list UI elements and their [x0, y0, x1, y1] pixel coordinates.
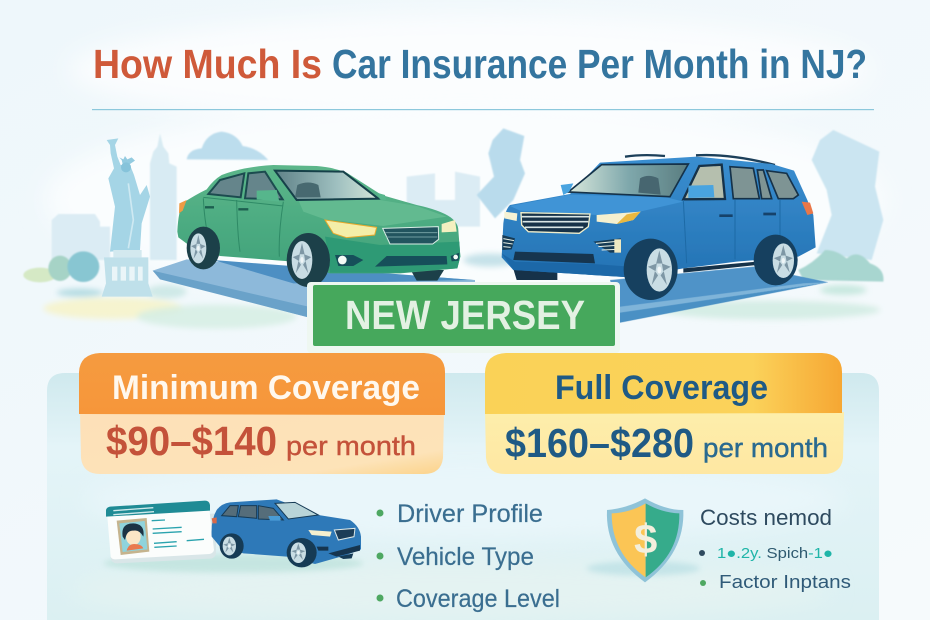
road platform left [153, 259, 475, 317]
full header band [485, 353, 842, 414]
icon: driver licence and small SUV [103, 499, 363, 573]
costs heading: Costs nemod [700, 505, 832, 530]
mirrors [561, 183, 714, 198]
item: vehicle type: Vehicle Type [397, 543, 534, 571]
NJ state silhouette left [477, 128, 525, 218]
ground wash [43, 285, 297, 329]
seat [638, 176, 661, 195]
lower intake and fog lights [335, 253, 459, 267]
small SUV [212, 499, 361, 567]
SUV underbody [683, 262, 757, 273]
minimum price: $90–$140 [106, 418, 277, 464]
costs line two: Factor Inptans [719, 572, 851, 592]
cloud [187, 132, 268, 160]
blue SUV [502, 155, 816, 300]
text: costs block [699, 505, 851, 592]
windshield [275, 171, 378, 200]
SUV hood [510, 195, 683, 215]
tail light [802, 202, 813, 215]
scenery: New Jersey landmarks left [23, 132, 480, 329]
icon: shield with dollar: $ [634, 515, 657, 562]
tower [150, 133, 177, 260]
door detail [203, 197, 283, 257]
front wheel [287, 233, 330, 287]
rear wheel [187, 227, 220, 269]
icon: shield with dollar [587, 498, 700, 582]
ground wash right [463, 253, 880, 319]
grille [383, 227, 439, 244]
headlights [325, 220, 377, 238]
ground wash under car [103, 554, 363, 573]
road platform right [610, 267, 828, 323]
full price band [485, 412, 844, 474]
side windows [683, 165, 725, 199]
door handles [205, 207, 248, 209]
full price: $160–$280 [505, 420, 694, 466]
door lines and handles [683, 200, 780, 263]
fog lights [502, 235, 621, 253]
list: cost factors [376, 500, 560, 613]
windshield [568, 164, 688, 197]
seat [295, 182, 321, 197]
distant buildings [52, 172, 480, 260]
hood highlight [298, 200, 447, 226]
front wheel [624, 239, 678, 300]
trees [23, 251, 99, 282]
New Jersey road sign [307, 282, 620, 353]
driver licence card [106, 501, 216, 563]
far front wheel [411, 270, 444, 281]
bushes [798, 250, 883, 282]
sedan body [177, 165, 460, 273]
NJ state silhouette right [812, 130, 883, 260]
item: coverage level: Coverage Level [396, 585, 560, 613]
title divider [92, 109, 874, 110]
card: full coverage [485, 353, 844, 474]
minimum price band [80, 412, 444, 474]
green sedan [177, 165, 460, 287]
costs line one: 1●.2y. Spich -1● [717, 545, 833, 562]
card: minimum coverage [79, 353, 445, 474]
scenery: New Jersey landmarks right [463, 128, 883, 323]
bumper [325, 237, 460, 273]
minimum heading: Minimum Coverage [112, 369, 420, 407]
SUV body [502, 157, 816, 277]
roof rails [625, 155, 775, 165]
tail light [179, 200, 187, 213]
full per month: per month [703, 433, 828, 463]
minimum header band [79, 353, 445, 415]
New Jersey road sign: NEW JERSEY [345, 292, 585, 338]
statue of liberty [102, 138, 153, 297]
bumper [502, 253, 630, 277]
side windows [208, 172, 283, 199]
title [93, 41, 867, 87]
minimum per month: per month [286, 431, 416, 461]
title: How Much Is [93, 41, 322, 87]
lower panel background [47, 373, 879, 620]
rear wheel [754, 235, 798, 285]
headlights [597, 212, 641, 224]
grille [521, 213, 590, 233]
lower intake [513, 252, 595, 263]
full heading: Full Coverage [555, 369, 768, 407]
side mirrors [257, 190, 386, 202]
far front wheel [513, 267, 557, 280]
item: driver profile: Driver Profile [397, 500, 543, 528]
